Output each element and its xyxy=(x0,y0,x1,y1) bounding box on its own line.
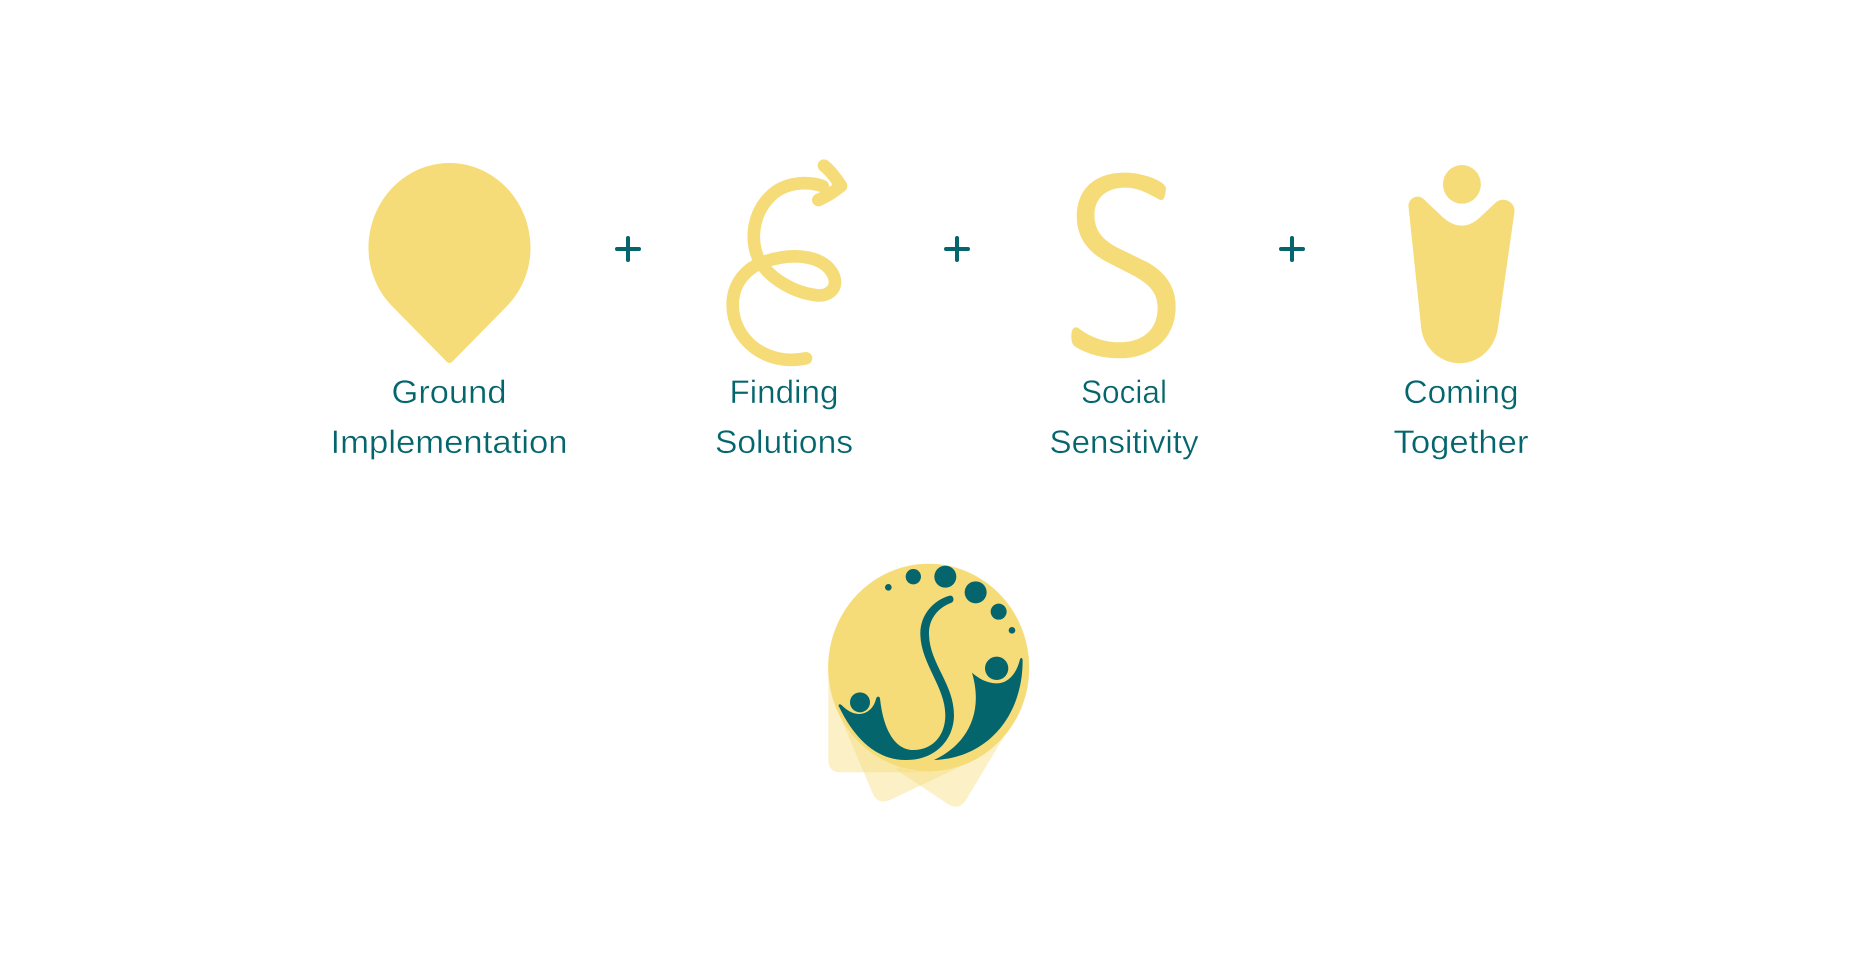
label: ground implementation: Ground xyxy=(392,374,506,410)
logo xyxy=(828,564,1029,807)
logo: arc of dots xyxy=(885,566,1015,634)
panel: coming together xyxy=(1394,165,1529,460)
icon: plus 1 xyxy=(617,238,639,260)
label: coming together xyxy=(1394,374,1529,460)
icon: swirl arrow xyxy=(733,166,841,360)
panel: social sensitivity xyxy=(1050,173,1198,460)
icon: location pin xyxy=(368,163,530,363)
logo: right figure xyxy=(934,657,1023,760)
label: finding solutions: Solutions xyxy=(715,424,853,460)
label: coming together: Together xyxy=(1394,424,1529,460)
panel: finding solutions xyxy=(715,166,853,460)
label: social sensitivity: Sensitivity xyxy=(1050,424,1198,460)
label: ground implementation: Implementation xyxy=(330,424,568,460)
label: social sensitivity xyxy=(1050,374,1198,460)
label: coming together: Coming xyxy=(1404,374,1518,410)
icon: letter S xyxy=(1071,173,1176,358)
label: finding solutions xyxy=(715,374,853,460)
label: social sensitivity: Social xyxy=(1081,374,1167,410)
logo: translucent pin shadows xyxy=(828,667,1010,807)
icon: plus 3 xyxy=(1281,238,1303,260)
icon: plus 2 xyxy=(946,238,968,260)
logo: main circle xyxy=(828,564,1029,772)
icon: person xyxy=(1408,165,1515,363)
panel: ground implementation xyxy=(330,163,568,460)
label: finding solutions: Finding xyxy=(730,374,838,410)
label: ground implementation xyxy=(330,374,568,460)
logo: left figure and S curve xyxy=(839,596,954,760)
